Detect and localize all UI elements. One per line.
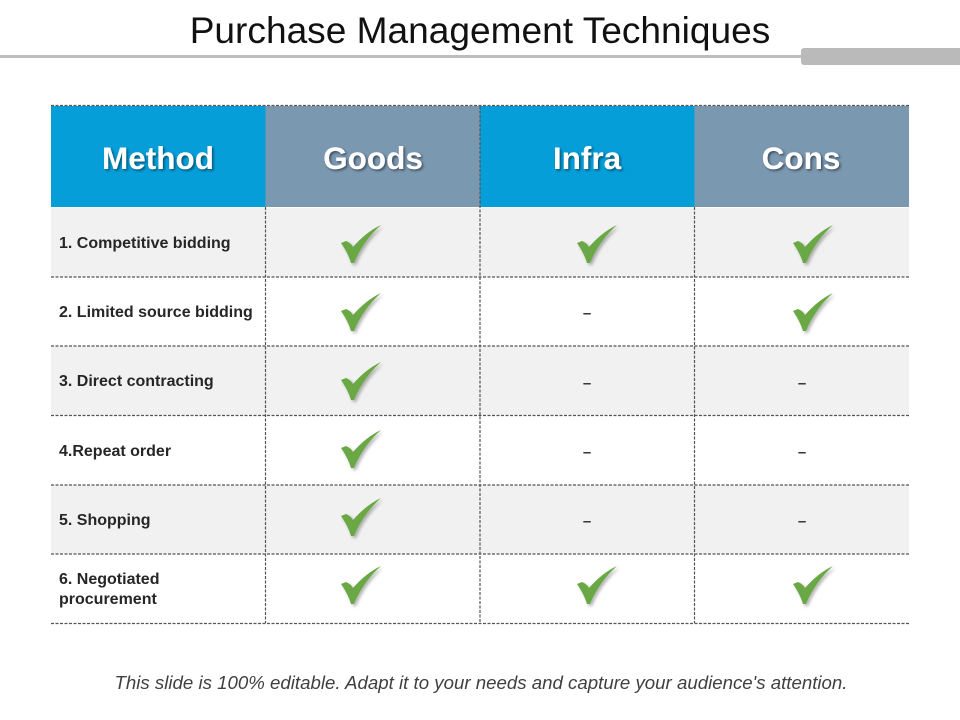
shaded row backgrounds (51, 208, 909, 554)
row labels: 1. Competitive bidding (59, 235, 231, 252)
row labels: 3. Direct contracting (59, 373, 214, 390)
dash marks: – (798, 444, 806, 461)
dash marks: – (583, 375, 591, 392)
dash marks: – (798, 375, 806, 392)
header row: Infra (553, 140, 622, 176)
table (51, 106, 909, 624)
dashed grid lines (51, 106, 909, 624)
row labels: 2. Limited source bidding (59, 304, 253, 321)
header row (51, 106, 909, 207)
row labels: 5. Shopping (59, 512, 151, 529)
footer note: This slide is 100% editable. Adapt it to your needs and capture your audience's attention. (114, 672, 848, 693)
header row: Cons (762, 140, 840, 176)
dash marks: – (798, 513, 806, 530)
row labels (59, 235, 253, 608)
title: Purchase Management Techniques (190, 9, 770, 51)
dash marks: – (583, 444, 591, 461)
dash marks (583, 305, 806, 530)
header rule with grey tab (0, 48, 960, 65)
header row: Goods (323, 140, 423, 176)
header row: Method (102, 140, 214, 176)
row labels: 6. Negotiated (59, 571, 159, 588)
row labels: 4.Repeat order (59, 443, 171, 460)
row labels: procurement (59, 591, 157, 608)
dash marks: – (583, 513, 591, 530)
dash marks: – (583, 305, 591, 322)
check marks (341, 225, 833, 604)
